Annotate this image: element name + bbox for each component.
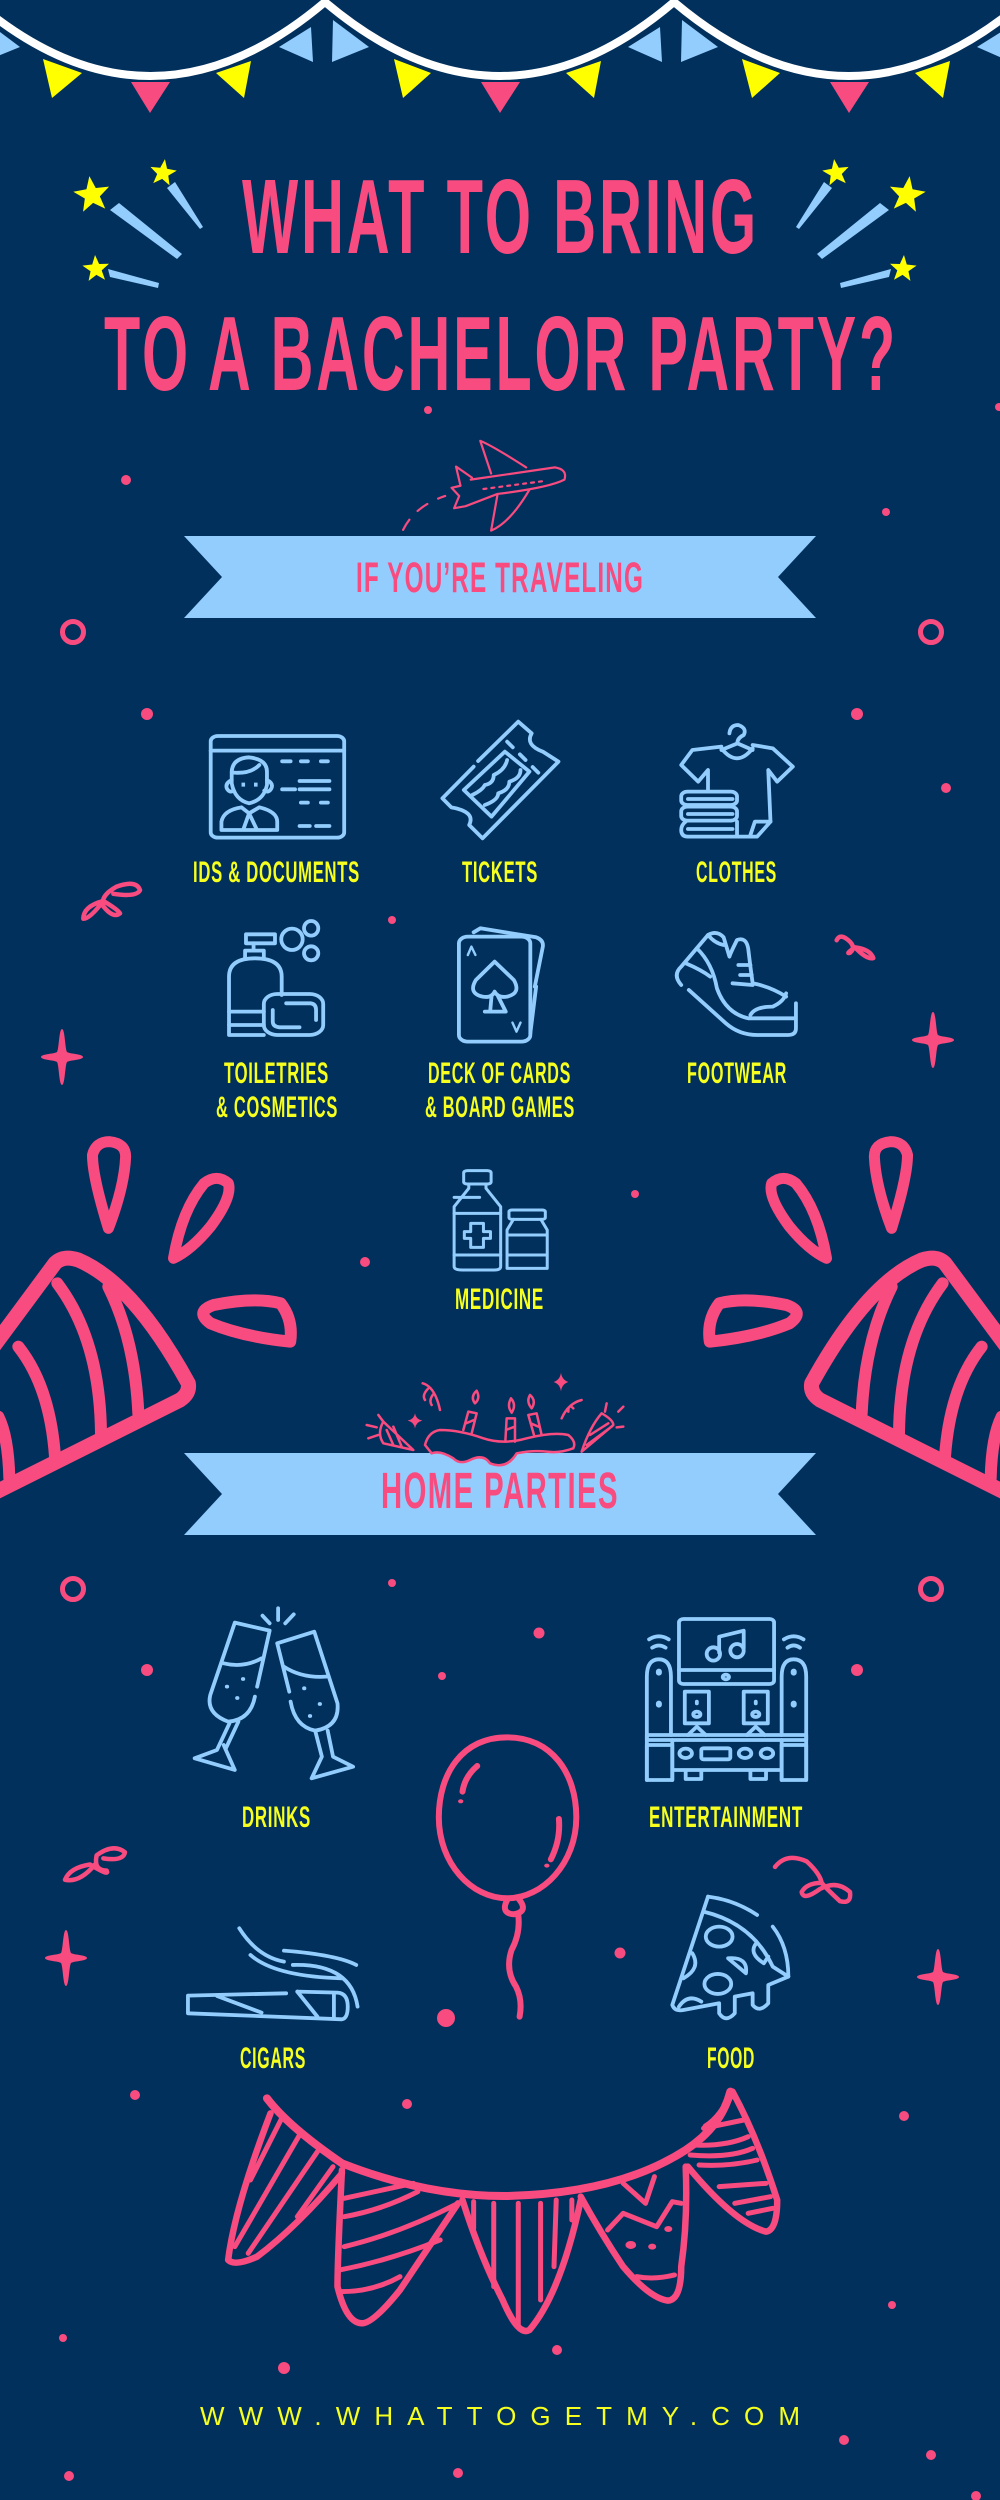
bunting: top garland (0, 2, 1000, 113)
labels: travel items: & COSMETICS (216, 1091, 338, 1124)
confetti dots (59, 403, 1000, 2500)
labels: travel items: & BOARD GAMES (425, 1091, 575, 1124)
decoration: stars and streamers right of title (796, 157, 928, 288)
icon: airplane (403, 441, 565, 531)
rings (62, 622, 942, 1600)
icon: entertainment system (647, 1619, 806, 1780)
icon: birthday cake doodle (367, 1373, 623, 1465)
party hat with drops: right (709, 1142, 1000, 1493)
labels: travel items: TICKETS (462, 856, 538, 889)
icon: champagne glasses (195, 1608, 353, 1778)
icon: playing cards (459, 928, 543, 1042)
labels: travel items (193, 856, 787, 1124)
labels: home party items: ENTERTAINMENT (649, 1801, 803, 1834)
labels: travel items: DECK OF CARDS (428, 1057, 571, 1090)
decoration: stars and streamers left of title (71, 157, 203, 288)
labels: home party items: FOOD (707, 2042, 755, 2075)
banner: if you're traveling (184, 536, 816, 618)
icon: toiletries (229, 921, 323, 1035)
ribbon curls (65, 884, 873, 1902)
banner: if you're traveling: IF YOU’RE TRAVELING (356, 554, 644, 602)
title (104, 158, 898, 413)
labels: home party items (240, 1801, 803, 2075)
banner: home parties (184, 1453, 816, 1535)
banner: home parties: HOME PARTIES (381, 1462, 619, 1519)
party hat with drops: left (0, 1142, 291, 1493)
labels: home party items: DRINKS (242, 1801, 311, 1834)
garland of patterned flags (228, 2092, 777, 2331)
icon: balloon (439, 1737, 576, 2017)
labels: travel items: TOILETRIES (224, 1057, 329, 1090)
icon: sneaker (677, 933, 796, 1035)
labels: travel items: FOOTWEAR (687, 1057, 787, 1090)
icon: pizza slice (672, 1897, 788, 2018)
icon: medicine bottles (454, 1171, 547, 1270)
icon: ID card (211, 736, 344, 838)
labels: home party items: CIGARS (240, 2042, 306, 2075)
website url: WWW.WHATTOGETMY.COM (200, 2401, 800, 2431)
label: medicine: MEDICINE (455, 1283, 544, 1316)
sparkles (41, 1012, 959, 2005)
labels: travel items: IDS & DOCUMENTS (193, 856, 360, 889)
icon: clothes (681, 725, 793, 837)
icon: cigar (188, 1928, 358, 2019)
labels: travel items: CLOTHES (696, 856, 777, 889)
icon: ticket (442, 722, 558, 838)
